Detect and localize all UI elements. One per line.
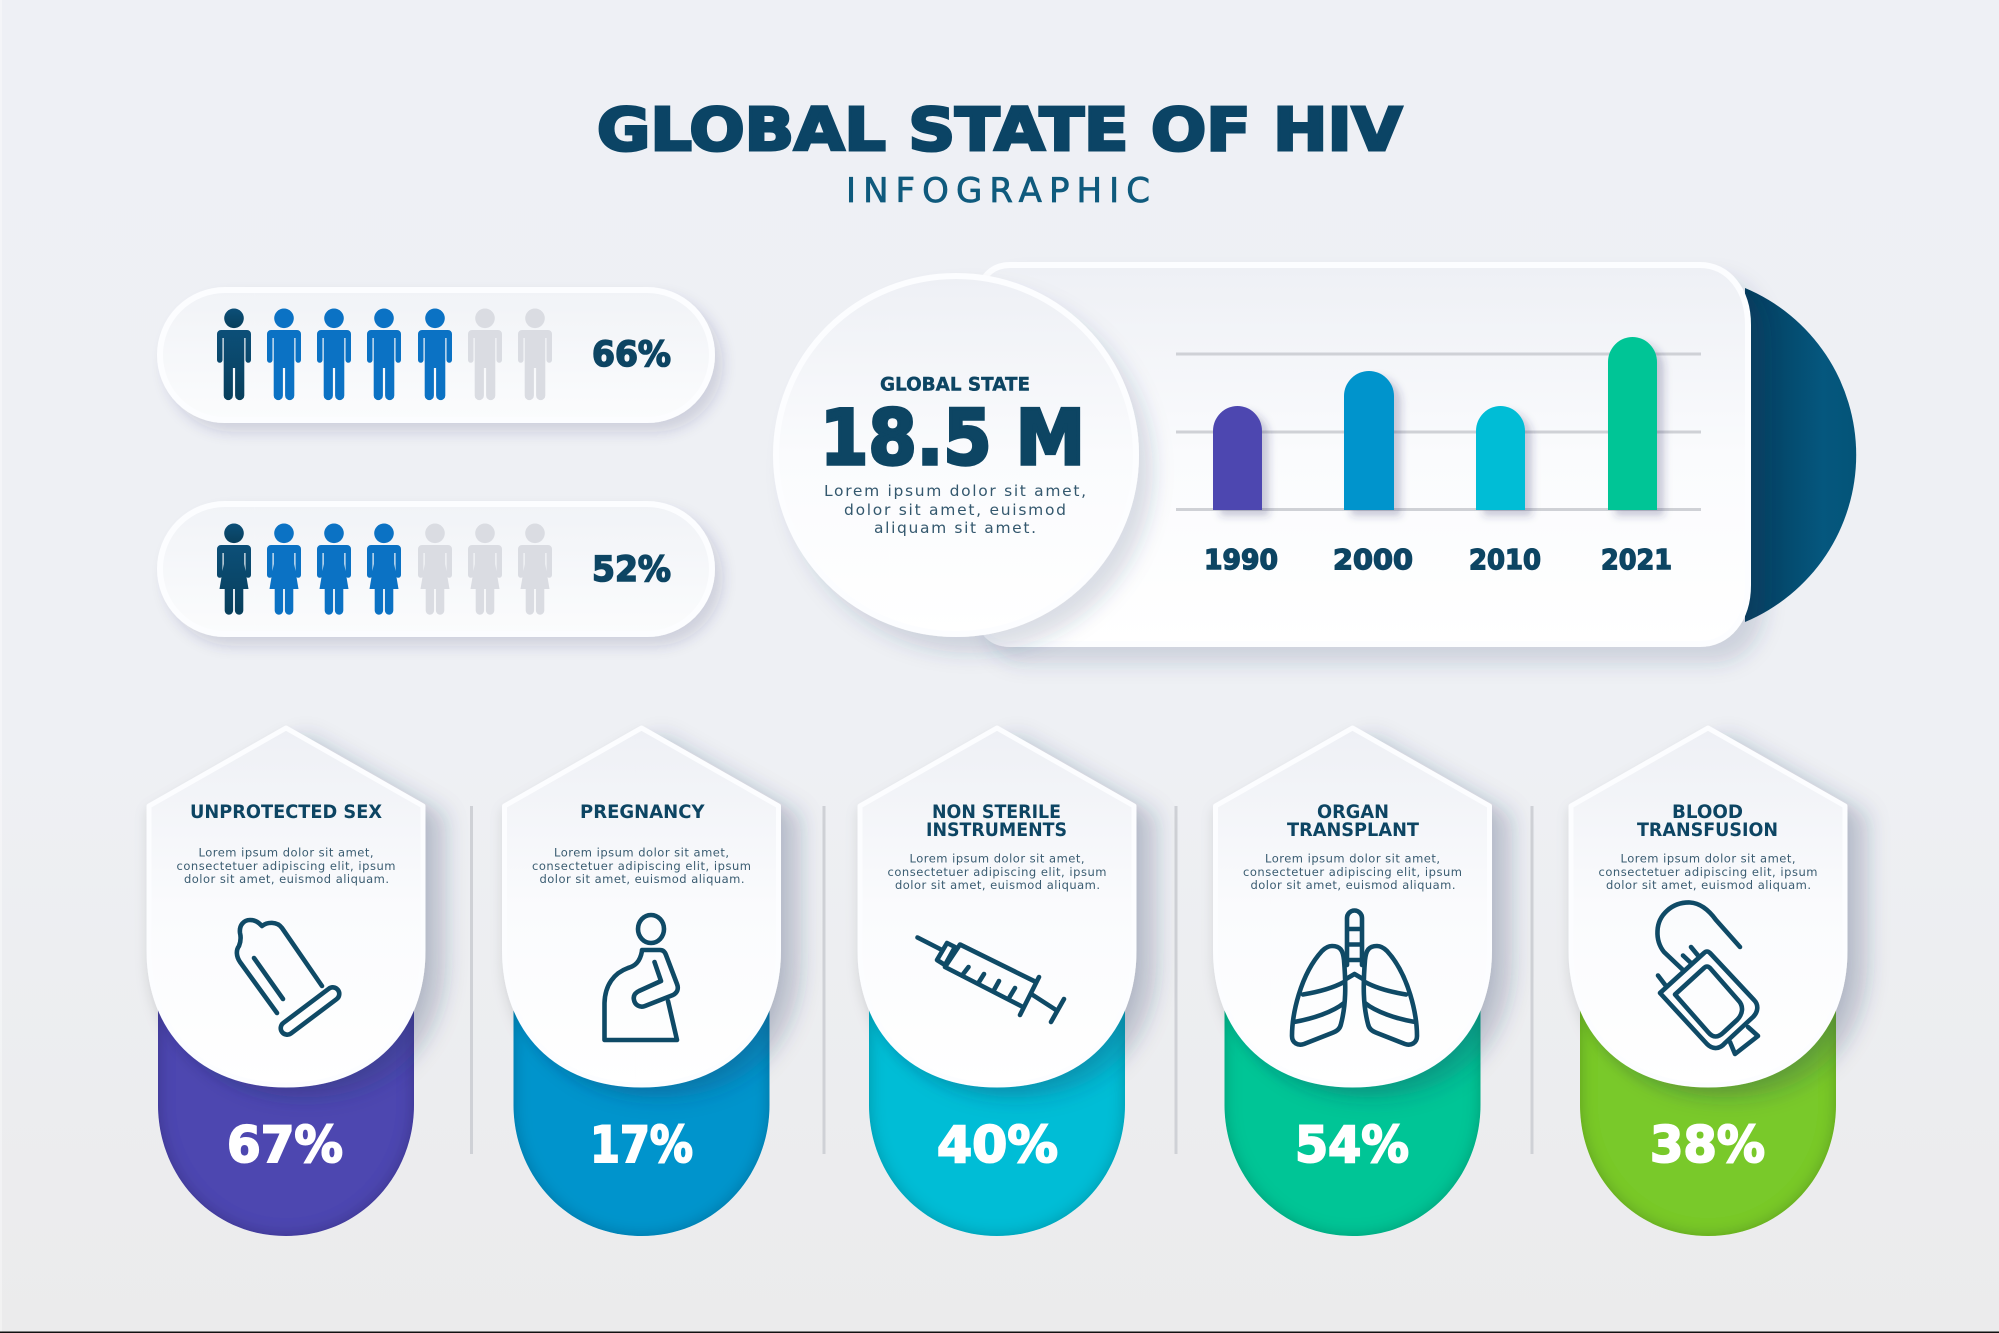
card: pregnancy (504, 728, 778, 1236)
circle stat (776, 276, 1136, 634)
icon: blood bag (1657, 902, 1758, 1054)
icon: lungs (1292, 911, 1417, 1045)
heading: NON STERILE (932, 801, 1061, 823)
description: Lorem ipsum dolor sit amet, (554, 846, 729, 860)
description (176, 846, 396, 886)
heading (1637, 801, 1778, 841)
panel: female pictogram 52% (160, 504, 712, 634)
dividers (472, 806, 1532, 1154)
year labels: 1990 (1204, 543, 1278, 576)
circle stat: GLOBAL STATE (880, 374, 1030, 396)
description (888, 852, 1106, 892)
description: dolor sit amet, euismod aliquam. (540, 872, 744, 886)
percentage: 67% (227, 1116, 343, 1174)
male figures (217, 308, 552, 400)
heading: UNPROTECTED SEX (190, 801, 382, 823)
card: organ transplant (1216, 728, 1490, 1236)
chart card (978, 265, 1748, 644)
title: GLOBAL STATE OF HIV (597, 95, 1402, 164)
percentage: 54% (1295, 1116, 1409, 1174)
description: consectetuer adipiscing elit, ipsum (888, 865, 1106, 879)
heading: INSTRUMENTS (926, 819, 1067, 841)
circle stat: aliquam sit amet. (874, 519, 1036, 537)
description: consectetuer adipiscing elit, ipsum (1243, 865, 1462, 879)
description: dolor sit amet, euismod aliquam. (184, 872, 389, 886)
circle stat: 18.5 M (820, 393, 1085, 482)
description: consectetuer adipiscing elit, ipsum (1598, 865, 1818, 879)
description (1243, 852, 1462, 892)
description: dolor sit amet, euismod aliquam. (1250, 878, 1456, 892)
heading: ORGAN (1317, 801, 1389, 823)
bar chart (1213, 337, 1657, 510)
percentage: 40% (937, 1116, 1058, 1174)
description: Lorem ipsum dolor sit amet, (198, 846, 374, 860)
percentage: 38% (1650, 1116, 1765, 1174)
year labels: 2021 (1601, 543, 1672, 576)
year labels: 2000 (1333, 543, 1413, 576)
description: consectetuer adipiscing elit, ipsum (176, 859, 396, 873)
heading (926, 801, 1067, 841)
percentage: 17% (590, 1116, 693, 1174)
description: consectetuer adipiscing elit, ipsum (532, 859, 751, 873)
heading: TRANSFUSION (1637, 819, 1778, 841)
card: unprotected sex (149, 728, 423, 1236)
circle stat: Lorem ipsum dolor sit amet, (824, 482, 1086, 500)
heading: PREGNANCY (580, 801, 705, 823)
description (532, 846, 751, 886)
icon: syringe (918, 938, 1064, 1022)
male percentage: 66% (592, 335, 671, 375)
female figures (217, 524, 552, 615)
card: non sterile instruments (860, 728, 1134, 1236)
dark semicircle (1745, 288, 1856, 622)
year labels: 2010 (1469, 543, 1541, 576)
card: blood transfusion (1571, 728, 1845, 1236)
description: Lorem ipsum dolor sit amet, (910, 852, 1084, 866)
female percentage: 52% (592, 550, 671, 590)
description: dolor sit amet, euismod aliquam. (895, 878, 1100, 892)
heading (1287, 801, 1419, 841)
heading: BLOOD (1672, 801, 1743, 823)
description (1598, 852, 1818, 892)
panel: male pictogram 66% (160, 290, 712, 420)
heading: TRANSPLANT (1287, 819, 1419, 841)
circle stat: dolor sit amet, euismod (844, 501, 1066, 519)
icon: pregnant woman (604, 915, 678, 1040)
year labels (1204, 543, 1672, 576)
icon: condom (237, 920, 342, 1037)
description: dolor sit amet, euismod aliquam. (1606, 878, 1811, 892)
description: Lorem ipsum dolor sit amet, (1265, 852, 1440, 866)
subtitle: INFOGRAPHIC (846, 171, 1150, 211)
panel: global state chart (776, 265, 1856, 644)
description: Lorem ipsum dolor sit amet, (1620, 852, 1796, 866)
